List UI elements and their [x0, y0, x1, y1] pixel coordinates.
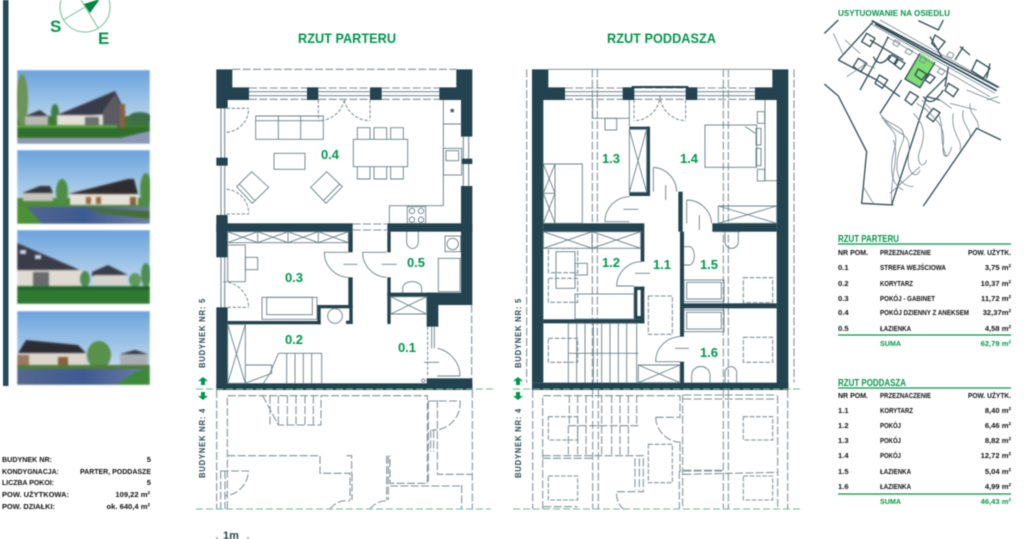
icon: compass	[50, 0, 110, 48]
door: balcony	[634, 95, 686, 121]
table: ground floor rooms: POW. UŻYTK.	[968, 248, 1011, 257]
photo: house view 2	[16, 149, 152, 225]
table: ground floor rooms: KORYTARZ	[880, 279, 913, 288]
table: ground floor rooms: STREFA WEJŚCIOWA	[880, 263, 946, 272]
photo: house view 3	[16, 229, 151, 305]
table: ground floor rooms: 3,75 m²	[985, 263, 1011, 272]
table: attic rooms: 12,72 m²	[981, 451, 1011, 460]
table: attic rooms: 1.4	[838, 451, 849, 460]
scale: 1m	[216, 530, 249, 539]
block: building summary	[2, 455, 152, 511]
room numbers: 1.4	[680, 151, 699, 166]
room numbers: 0.1	[398, 340, 416, 355]
doors: living room	[223, 100, 428, 377]
building labels: ground floor: BUDYNEK NR: 5	[198, 298, 207, 368]
furniture: rooms 0.1 to 0.5	[228, 232, 461, 383]
table: attic rooms: NR POM.	[838, 391, 868, 400]
table: attic rooms: RZUT PODDASZA	[838, 378, 906, 389]
window frames and dashed outlines	[221, 69, 472, 378]
building labels: attic: BUDYNEK NR: 5	[514, 298, 523, 368]
ghost plan: attic building 4	[533, 390, 788, 509]
heading: site location: USYTUOWANIE NA OSIEDLU	[838, 8, 950, 18]
block: building summary: LICZBA POKOI:	[2, 478, 54, 487]
block: building summary: 109,22 m²	[115, 490, 150, 499]
block: building summary: KONDYGNACJA:	[2, 467, 59, 476]
table: ground floor rooms: SUMA	[880, 339, 901, 348]
table: attic rooms: 6,46 m²	[985, 421, 1011, 430]
furniture: rooms 1.3 and 1.4	[543, 100, 777, 230]
table: attic rooms: SUMA	[880, 497, 901, 506]
walls	[532, 69, 788, 390]
room numbers: 1.2	[602, 255, 620, 270]
table: ground floor rooms: 0.4	[838, 308, 849, 317]
table: ground floor rooms	[838, 234, 1011, 348]
table: attic rooms: 8,40 m²	[985, 406, 1011, 415]
photo: house view 1	[16, 69, 152, 145]
table: ground floor rooms: 0.3	[838, 294, 849, 303]
room numbers: 1.3	[602, 151, 620, 166]
room numbers: 1.1	[653, 257, 671, 272]
block: building summary: 5	[147, 478, 152, 487]
table: ground floor rooms: 0.5	[838, 324, 849, 333]
floor plan: ground floor	[216, 69, 472, 390]
table: ground floor rooms: POKÓJ DZIENNY Z ANEKSEM	[880, 308, 969, 317]
furniture: living room	[237, 100, 462, 223]
block: building summary: POW. DZIAŁKI:	[2, 502, 55, 511]
table: attic rooms: 8,82 m²	[985, 436, 1011, 445]
table: attic rooms: 1.2	[838, 421, 849, 430]
table: ground floor rooms: 0.1	[838, 263, 849, 272]
heading: attic floor: RZUT PODDASZA	[607, 30, 716, 46]
table: ground floor rooms: 32,37m²	[983, 308, 1011, 317]
window frames and dashed outlines	[527, 69, 794, 383]
building labels: ground floor: BUDYNEK NR: 4	[198, 408, 207, 478]
site map	[824, 20, 1001, 206]
table: ground floor rooms: PRZEZNACZENIE	[880, 248, 931, 257]
block: building summary: 5	[147, 455, 152, 464]
table: attic rooms: 4,99 m²	[985, 482, 1011, 491]
table: attic rooms: PRZEZNACZENIE	[880, 391, 931, 400]
furniture: living room: *	[450, 107, 455, 119]
table: attic rooms: POKÓJ	[880, 421, 901, 430]
table: attic rooms: POW. UŻYTK.	[968, 391, 1011, 400]
table: attic rooms	[838, 378, 1011, 506]
table: attic rooms: 5,04 m²	[985, 467, 1011, 476]
room numbers	[285, 147, 718, 360]
table: ground floor rooms: 62,79 m²	[981, 339, 1011, 348]
block: building summary: ok. 640,4 m²	[107, 502, 150, 511]
building labels: attic: BUDYNEK NR: 4	[514, 408, 523, 478]
table: ground floor rooms: POKÓJ - GABINET	[880, 294, 935, 303]
room numbers: 0.4	[321, 147, 340, 162]
table: ground floor rooms: 10,37 m²	[981, 279, 1011, 288]
building boundary lines	[196, 389, 800, 509]
block: building summary: PARTER, PODDASZE	[80, 467, 151, 476]
table: ground floor rooms: ŁAZIENKA	[880, 324, 911, 333]
sidebar bar	[3, 0, 8, 386]
building labels: ground floor	[198, 298, 208, 478]
block: building summary: BUDYNEK NR:	[2, 455, 52, 464]
floor plan: attic	[527, 69, 794, 390]
building labels: attic	[513, 298, 523, 478]
table: attic rooms: POKÓJ	[880, 451, 901, 460]
table: attic rooms: ŁAZIENKA	[880, 467, 911, 476]
table: attic rooms: 1.5	[838, 467, 849, 476]
table: ground floor rooms: 0.2	[838, 279, 849, 288]
dashed roof windows	[548, 248, 773, 362]
ghost plan: ground floor building 4	[217, 390, 472, 509]
room numbers: 0.3	[285, 270, 303, 285]
walls	[216, 69, 472, 390]
table: ground floor rooms: NR POM.	[838, 248, 868, 257]
table: attic rooms: 1.1	[838, 406, 849, 415]
room numbers: 1.6	[700, 345, 718, 360]
photo: house view 4	[16, 310, 151, 386]
table: attic rooms: 1.3	[838, 436, 849, 445]
heading: ground floor: RZUT PARTERU	[298, 30, 396, 46]
table: attic rooms: KORYTARZ	[880, 406, 913, 415]
table: ground floor rooms: 4,58 m²	[985, 324, 1011, 333]
table: attic rooms: 46,43 m²	[981, 497, 1011, 506]
icon: compass: E	[98, 29, 109, 48]
room numbers: 1.5	[700, 257, 718, 272]
table: ground floor rooms: RZUT PARTERU	[838, 234, 899, 245]
room numbers: 0.5	[407, 255, 425, 270]
table: attic rooms: POKÓJ	[880, 436, 901, 445]
table: attic rooms: ŁAZIENKA	[880, 482, 911, 491]
table: attic rooms: 1.6	[838, 482, 849, 491]
room numbers: 0.2	[285, 332, 303, 347]
icon: compass: S	[50, 17, 61, 36]
furniture: rooms 1.1, 1.2, 1.5, 1.6	[543, 232, 741, 383]
table: ground floor rooms: 11,72 m²	[981, 294, 1011, 303]
block: building summary: POW. UŻYTKOWA:	[2, 490, 69, 499]
